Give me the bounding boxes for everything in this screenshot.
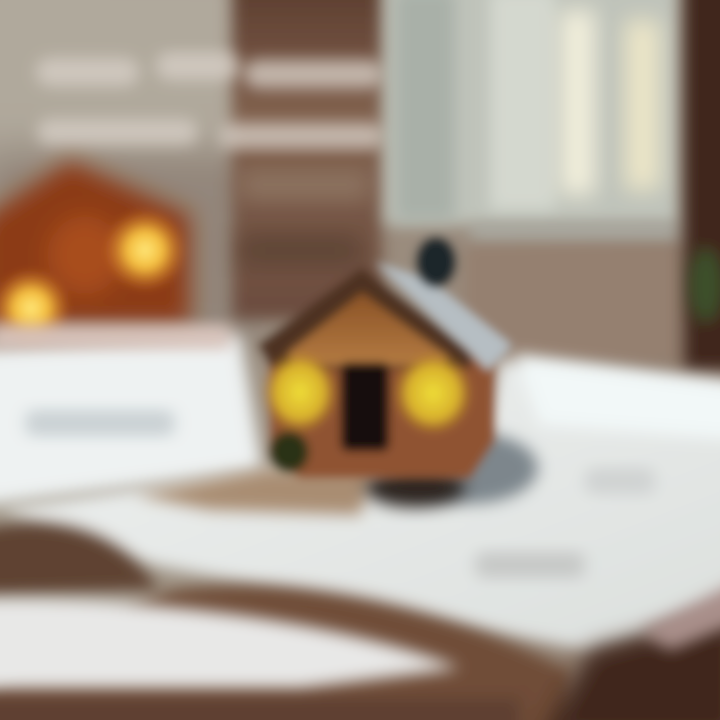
window sill and lower wall bbox=[465, 222, 680, 360]
miniature house bbox=[258, 237, 512, 478]
grey roof slope bbox=[375, 262, 512, 372]
door bbox=[342, 364, 388, 450]
curtain bbox=[684, 0, 720, 370]
background glowing house bbox=[0, 160, 190, 348]
brick wall column bbox=[232, 0, 382, 320]
gable roof bbox=[258, 268, 472, 368]
open book, lower spread bbox=[0, 522, 720, 720]
window glow right bbox=[103, 208, 187, 292]
window glow left bbox=[0, 268, 71, 348]
left stack of papers bbox=[0, 325, 262, 505]
small green shrub bbox=[270, 432, 308, 472]
window bbox=[385, 0, 680, 225]
right window bbox=[391, 349, 475, 437]
blurred wall lettering bbox=[50, 66, 372, 136]
house body bbox=[270, 345, 495, 478]
house shadow disc bbox=[365, 432, 538, 508]
right papers bbox=[0, 355, 720, 650]
tan base under house bbox=[135, 468, 375, 515]
chimney bbox=[416, 237, 456, 287]
left window bbox=[260, 348, 340, 436]
